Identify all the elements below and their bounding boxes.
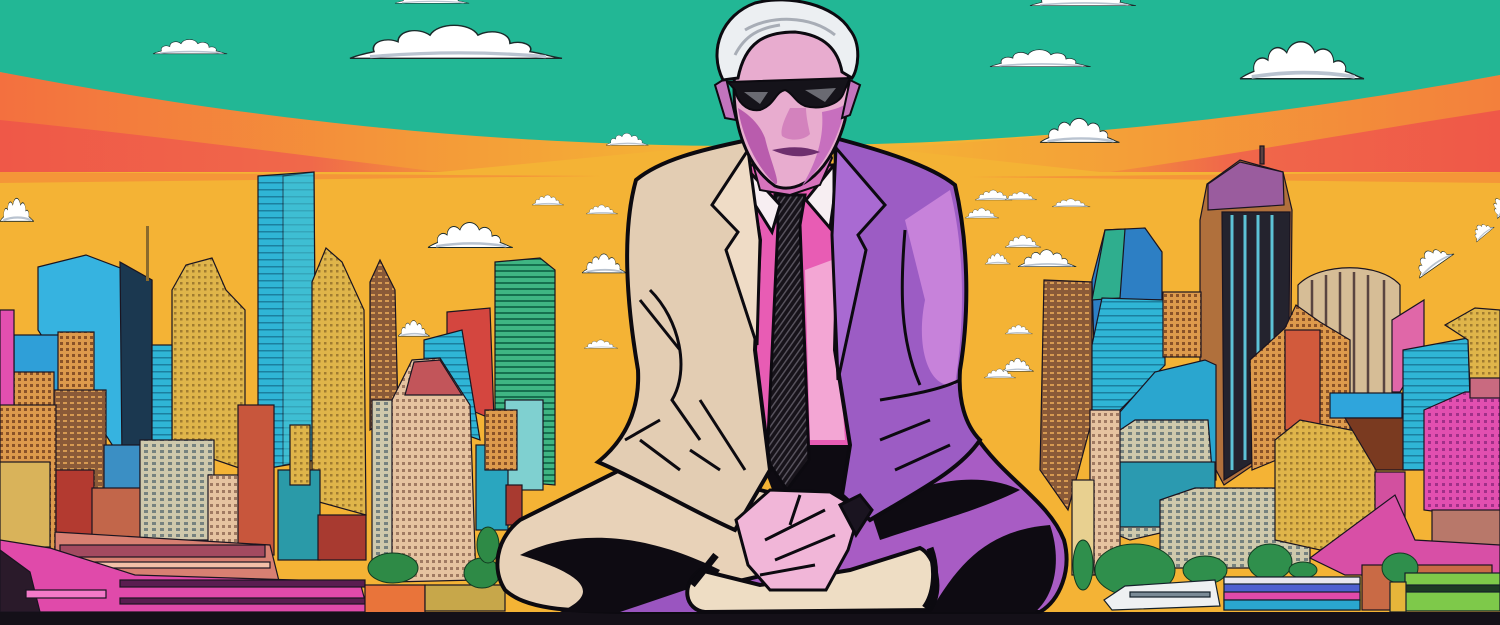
- jacket right side: [835, 138, 980, 520]
- jacket left side: [598, 140, 770, 530]
- head: cheek shading: [738, 108, 777, 184]
- sunglasses: [728, 78, 850, 110]
- building: dark striped tall tower: [1200, 160, 1292, 485]
- building: sandstone low block: [1160, 488, 1310, 568]
- building: teal glass tower: [258, 172, 316, 470]
- jacket left lapel: [712, 150, 760, 345]
- building: pink roofed terminal: [1310, 495, 1500, 575]
- building: blue round tower: [1403, 338, 1470, 470]
- tie: [767, 195, 809, 490]
- boat: white ferry: [1104, 580, 1220, 610]
- building: rounded beige tower: [1298, 268, 1400, 395]
- building: red slab: [447, 308, 494, 420]
- building: blue curved block: [1120, 360, 1216, 480]
- building: gold block foreground: [1275, 420, 1376, 550]
- building: gold deco tower: [172, 258, 245, 470]
- clouds: [0, 0, 1500, 378]
- jacket right highlight: [905, 190, 962, 385]
- building: slim brick tower: [370, 260, 398, 430]
- left skyline: [0, 172, 555, 613]
- man: [497, 0, 1067, 612]
- jacket left folds: [625, 290, 745, 470]
- boat: blue and pink ferry: [1224, 577, 1360, 610]
- building: grey-teal office: [1105, 420, 1216, 540]
- head: mouth: [772, 147, 820, 156]
- hands: [736, 490, 872, 590]
- building: pink slab: [1392, 300, 1424, 392]
- shadow left leg: [520, 538, 720, 612]
- head: nose shadow: [781, 108, 810, 140]
- building: pink pier sheds: [0, 540, 368, 612]
- building: magenta block: [1424, 392, 1500, 520]
- building: low left stack: [0, 405, 56, 550]
- trees left: [368, 527, 500, 588]
- background: red-orange band right: [880, 75, 1500, 183]
- building: orange brick tower: [1250, 305, 1350, 470]
- foot: shoe: [687, 548, 937, 612]
- legs: trousers and crossed legs: [497, 435, 1067, 612]
- building: ornate cream tower: [392, 358, 476, 582]
- shadow right leg: [930, 525, 1056, 612]
- building: blue mid tower: [424, 330, 480, 440]
- jacket right folds: [880, 230, 960, 470]
- neck: [752, 130, 832, 195]
- trees right: [1073, 540, 1418, 596]
- right skyline: [1040, 146, 1500, 610]
- building: teal left block: [152, 345, 172, 470]
- building: tan deco tower: [312, 248, 366, 515]
- jacket right lapel: [832, 148, 885, 380]
- building: salmon low terminal: [55, 532, 280, 585]
- boat: green ferry: [1390, 573, 1500, 612]
- building: blue office block: [38, 255, 152, 460]
- collar: [748, 165, 834, 232]
- ground strip: [0, 612, 1500, 625]
- building: brown striped tower: [1040, 280, 1092, 510]
- background: red-orange band left: [0, 72, 690, 183]
- building: green slatted tower: [495, 258, 555, 485]
- hair: [717, 0, 858, 80]
- black waist: [755, 445, 860, 510]
- ears: [715, 78, 860, 120]
- building: khaki far-right: [1445, 308, 1500, 390]
- background: teal sky arc: [0, 0, 1500, 146]
- right leg purple: [690, 435, 1067, 612]
- torso: shirt: [745, 165, 850, 450]
- building: teal and blue glass tower: [1092, 228, 1162, 350]
- building: pale teal low tower: [505, 400, 543, 490]
- head: face: [734, 30, 849, 188]
